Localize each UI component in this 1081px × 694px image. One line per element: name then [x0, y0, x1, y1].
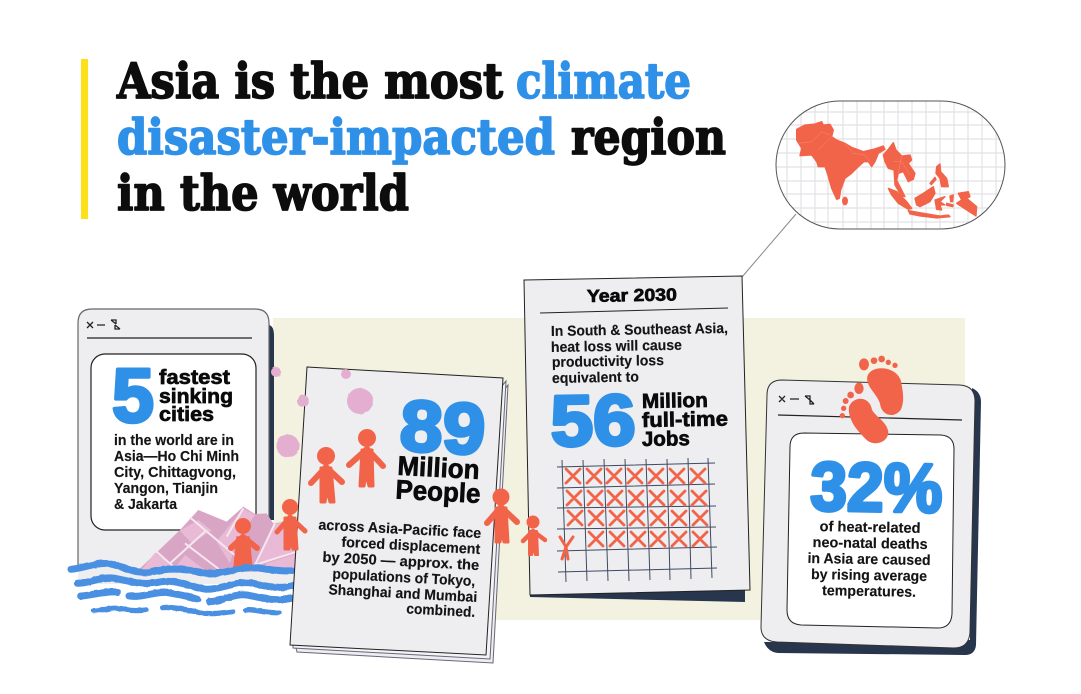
- heading: Million full-time Jobs: full-time: [642, 408, 728, 432]
- body text: forced displacement: [341, 535, 481, 558]
- window controls: [779, 396, 814, 404]
- heading: Million People: Million: [397, 451, 480, 485]
- body text: & Jakarta: [114, 497, 178, 513]
- icon: stick figure cross: [560, 537, 573, 559]
- body text: in the world are in: [114, 433, 234, 449]
- body text: of heat-related: [819, 519, 921, 537]
- infographic canvas: [68, 59, 1006, 664]
- body text: in Asia are caused: [807, 551, 931, 569]
- title: Asia is the most: [116, 52, 503, 110]
- title: [116, 52, 726, 222]
- body text: neo-natal deaths: [812, 535, 928, 553]
- heading: Year 2030: Year 2030: [587, 284, 677, 306]
- person 1: [311, 447, 342, 502]
- body text: Shanghai and Mumbai: [328, 582, 478, 606]
- heading: Million People: People: [395, 475, 481, 509]
- heading: Million full-time Jobs: [642, 389, 728, 451]
- map: South and Southeast Asia: [797, 122, 977, 218]
- icon: pink flooded city: [137, 507, 297, 572]
- title: disaster-impacted: [117, 108, 555, 166]
- body text: equivalent to: [552, 369, 639, 387]
- body text: temperatures.: [822, 583, 916, 601]
- heading: fastest sinking cities: fastest: [159, 366, 230, 389]
- body text: combined.: [406, 601, 476, 621]
- heading: Million full-time Jobs: Million: [642, 389, 708, 413]
- inner white box: [91, 354, 256, 530]
- big number 5: 5: [112, 354, 154, 439]
- body text: Yangon, Tianjin: [114, 481, 218, 497]
- body text: Asia—Ho Chi Minh: [114, 449, 239, 465]
- icon: pink particles: [271, 367, 373, 458]
- body text: across Asia-Pacific face: [318, 517, 482, 542]
- title: climate: [516, 52, 691, 110]
- panel: sinking cities: [78, 309, 274, 570]
- body text: productivity loss: [552, 353, 664, 371]
- panel: Year 2030: [524, 276, 750, 602]
- person 3: [277, 499, 305, 549]
- map callout: [776, 100, 1006, 230]
- person 4: [487, 488, 517, 542]
- heading: Million full-time Jobs: Jobs: [642, 427, 690, 451]
- icons: people walking: [277, 429, 517, 549]
- icon: footprints: [840, 356, 903, 443]
- panel: displaced people paper: [290, 367, 508, 663]
- window controls: [87, 320, 120, 329]
- cream background panel: [273, 318, 965, 620]
- big number 56: 56: [550, 381, 636, 462]
- body text: [807, 519, 931, 601]
- heading: fastest sinking cities: [159, 366, 233, 426]
- panel: neo-natal deaths: [761, 380, 981, 655]
- big number 89: 89: [398, 386, 487, 470]
- body text: heat loss will cause: [551, 338, 682, 356]
- icon: small person on grid panel: [523, 516, 545, 555]
- white ground under the water: [60, 570, 300, 644]
- body text: City, Chittagvong,: [114, 465, 236, 481]
- icon: water waves: [71, 563, 294, 614]
- icon: person on city: [231, 518, 257, 568]
- body text: In South & Southeast Asia,: [551, 321, 728, 340]
- chart: jobs grid: [557, 458, 717, 582]
- body text: by 2050 — approx. the: [322, 550, 480, 574]
- body text: by rising average: [811, 567, 927, 585]
- body text: [114, 433, 239, 513]
- inner white box: [787, 433, 954, 628]
- title: in the world: [117, 164, 409, 222]
- heading: fastest sinking cities: sinking: [159, 385, 233, 408]
- person 2: [349, 429, 383, 486]
- title accent bar: [81, 59, 88, 219]
- big number 32%: 32%: [810, 448, 943, 527]
- body text: [551, 321, 728, 387]
- heading: fastest sinking cities: cities: [159, 403, 214, 426]
- body text: [318, 517, 482, 621]
- map callout pointer: [742, 214, 796, 277]
- body text: populations of Tokyo,: [332, 567, 476, 590]
- title: region: [571, 108, 726, 166]
- heading: Million People: [395, 451, 481, 509]
